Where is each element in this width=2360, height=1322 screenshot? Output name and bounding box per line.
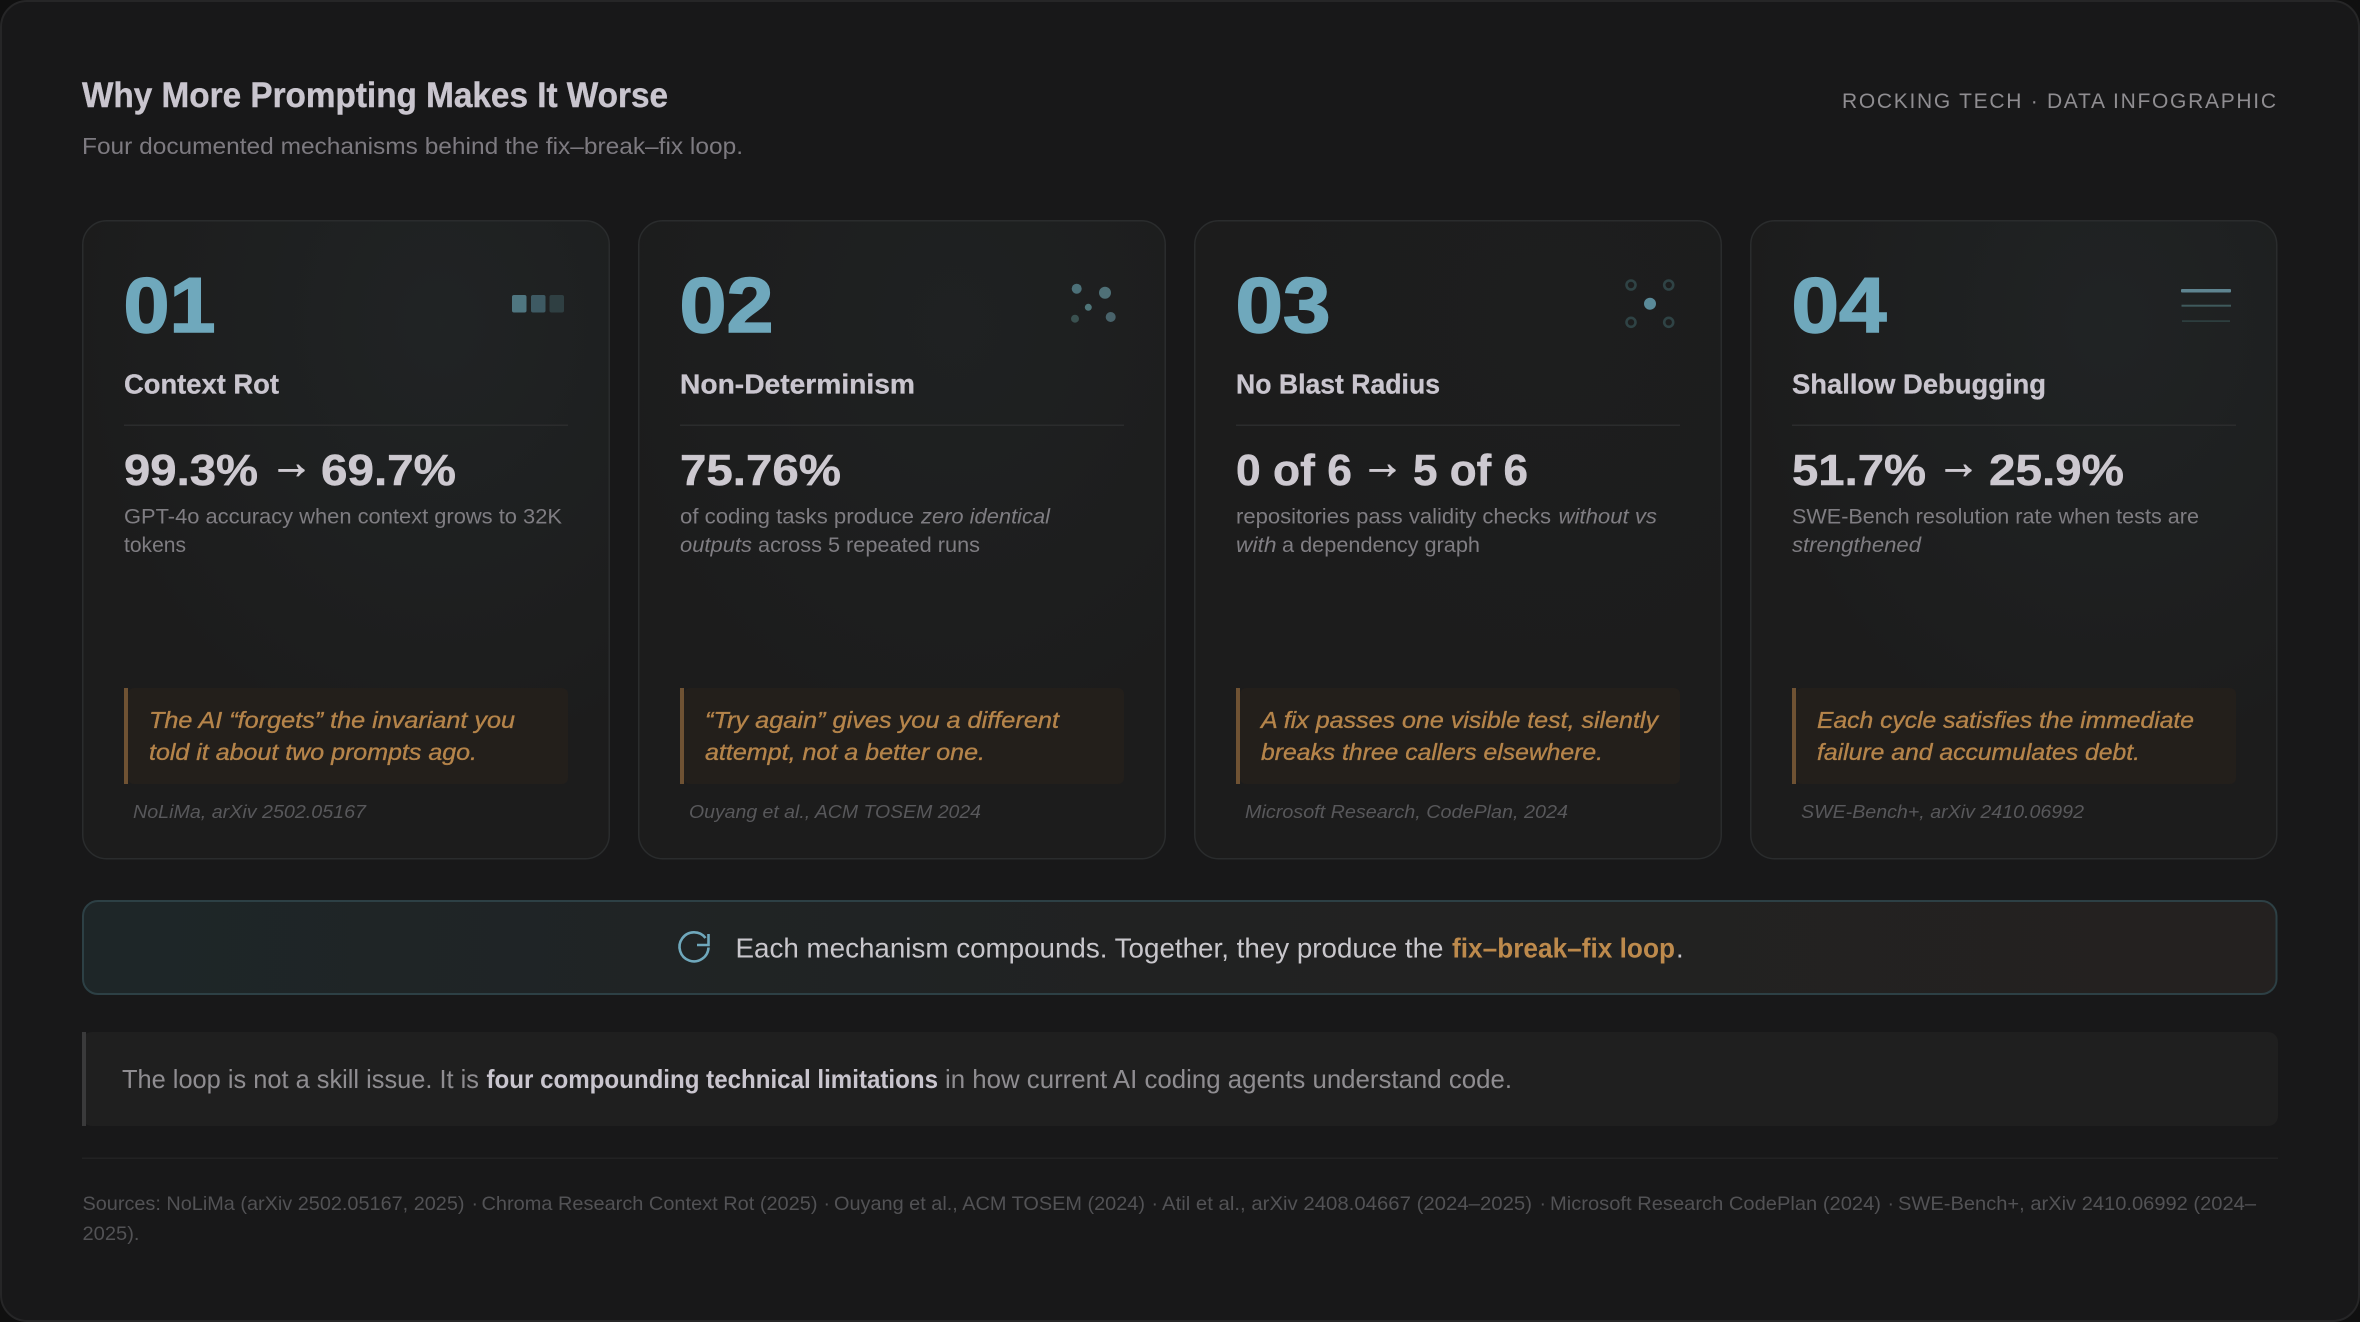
source: Ouyang et al., ACM TOSEM 2024 <box>689 801 981 822</box>
sources footer: Chroma Research Context Rot (2025) <box>482 1193 818 1215</box>
callout quote: “Try again” gives you a different <box>705 707 1061 733</box>
description <box>1792 506 2199 557</box>
statistic: 25.9% <box>1989 446 2124 495</box>
sources footer: Ouyang et al., ACM TOSEM (2024) <box>834 1193 1145 1215</box>
description: strengthened <box>1792 534 1922 557</box>
panel: context rot <box>83 221 609 859</box>
statistic <box>1792 436 2124 495</box>
sources footer: · <box>472 1193 478 1215</box>
banner: fix-break-fix loop <box>83 901 2276 994</box>
heading: Context Rot <box>124 368 279 400</box>
sources footer: Sources: NoLiMa (arXiv 2502.05167, 2025) <box>82 1193 464 1215</box>
panel: shallow debugging <box>1751 221 2277 859</box>
sources footer: · <box>1152 1193 1158 1215</box>
statistic <box>1236 436 1528 495</box>
heading: Shallow Debugging <box>1792 368 2046 400</box>
statistic: → <box>1937 436 1980 488</box>
description: a dependency graph <box>1282 534 1480 557</box>
statistic: 99.3% <box>124 446 258 495</box>
callout quote <box>124 688 568 784</box>
sources footer: Microsoft Research CodePlan (2024) <box>1550 1193 1881 1215</box>
sources footer: 2025). <box>82 1223 140 1245</box>
icon: scattered dots <box>1071 284 1116 323</box>
description: outputs <box>680 534 753 557</box>
description: repositories pass validity checks <box>1236 506 1551 528</box>
callout quote: The AI “forgets” the invariant you <box>149 707 515 733</box>
statistic: → <box>1361 436 1404 488</box>
panel: no blast radius <box>1195 221 1721 859</box>
icon: fading lines <box>2181 289 2231 322</box>
callout quote <box>1236 688 1680 784</box>
brand tag: ROCKING TECH · DATA INFOGRAPHIC <box>1842 90 2276 113</box>
number: 04 <box>1792 261 1886 349</box>
statistic: 69.7% <box>321 446 456 495</box>
callout quote: attempt, not a better one. <box>705 739 985 765</box>
sources footer <box>82 1193 2256 1245</box>
icon: loop arrow <box>680 932 708 961</box>
callout quote: failure and accumulates debt. <box>1817 739 2140 765</box>
source: Microsoft Research, CodePlan, 2024 <box>1245 801 1568 822</box>
statistic: → <box>270 436 313 488</box>
source: NoLiMa, arXiv 2502.05167 <box>133 801 367 822</box>
callout quote: told it about two prompts ago. <box>149 739 477 765</box>
description: without vs <box>1558 506 1658 528</box>
icon: hub with rings <box>1626 280 1673 327</box>
panel: non-determinism <box>639 221 1165 859</box>
icon: context blocks <box>512 295 564 312</box>
sources footer: SWE-Bench+, arXiv 2410.06992 (2024– <box>1898 1193 2256 1215</box>
header <box>82 76 2276 159</box>
description <box>1236 506 1658 557</box>
description: with <box>1236 534 1276 557</box>
conclusion callout: The loop is not a skill issue. It is <box>122 1064 479 1094</box>
conclusion callout: four compounding technical limitations <box>486 1064 938 1094</box>
heading: No Blast Radius <box>1236 368 1440 400</box>
banner text: . <box>1676 932 1684 964</box>
sources footer: · <box>1888 1193 1894 1215</box>
number: 01 <box>124 261 216 349</box>
banner text: Each mechanism compounds. Together, they produce the <box>736 932 1444 964</box>
description: SWE-Bench resolution rate when tests are <box>1792 506 2199 528</box>
description: tokens <box>124 534 186 557</box>
conclusion callout: in how current AI coding agents understand code. <box>945 1064 1512 1094</box>
sources footer: · <box>1540 1193 1546 1215</box>
description: GPT-4o accuracy when context grows to 32K <box>124 506 562 528</box>
description: of coding tasks produce <box>680 506 914 528</box>
statistic: 5 of 6 <box>1413 446 1528 495</box>
description: zero identical <box>920 506 1051 528</box>
statistic: 0 of 6 <box>1236 446 1352 495</box>
callout quote <box>1792 688 2236 784</box>
conclusion callout <box>82 1032 2278 1126</box>
statistic: 51.7% <box>1792 446 1926 495</box>
description: across 5 repeated runs <box>758 534 980 557</box>
heading: Non-Determinism <box>680 368 915 400</box>
source: SWE-Bench+, arXiv 2410.06992 <box>1801 801 2085 822</box>
statistic: 75.76% <box>680 446 841 495</box>
number: 03 <box>1236 261 1330 349</box>
callout quote: breaks three callers elsewhere. <box>1261 739 1603 765</box>
banner text: fix–break–fix loop <box>1452 932 1675 964</box>
description <box>124 506 562 557</box>
statistic <box>124 436 456 495</box>
callout quote: A fix passes one visible test, silently <box>1259 707 1659 733</box>
description <box>680 506 1051 557</box>
sources footer: · <box>824 1193 830 1215</box>
title: Why More Prompting Makes It Worse <box>82 76 668 115</box>
callout quote <box>680 688 1124 784</box>
callout quote: Each cycle satisfies the immediate <box>1817 707 2194 733</box>
subtitle: Four documented mechanisms behind the fix–break–fix loop. <box>82 133 743 159</box>
sources footer: Atil et al., arXiv 2408.04667 (2024–2025) <box>1162 1193 1532 1215</box>
number: 02 <box>680 261 774 349</box>
